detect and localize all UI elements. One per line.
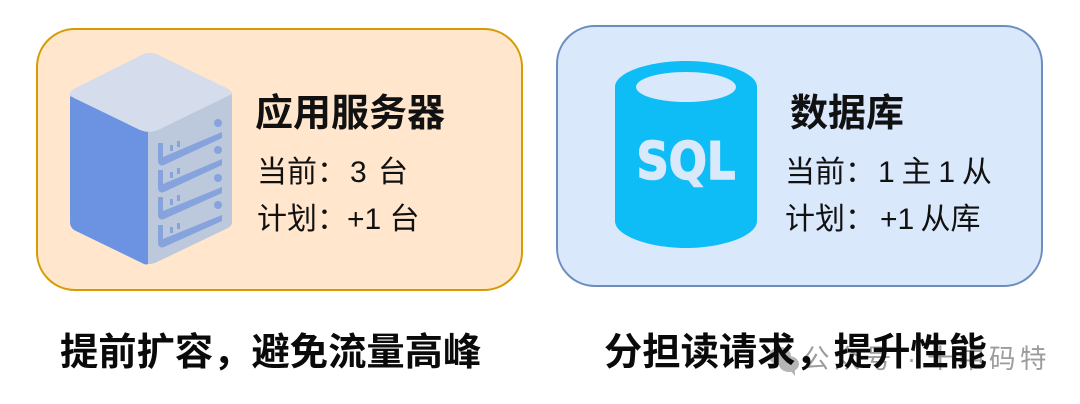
icon: SQL database cylinder: SQL <box>636 132 736 192</box>
caption: database: 分担读请求，提升性能 <box>604 331 987 374</box>
watermark <box>769 344 1051 376</box>
text: server current: 当前：3 台 <box>257 156 408 189</box>
text: database current: 当前：1 主 1 从 <box>785 156 992 189</box>
heading: application server: 应用服务器 <box>255 93 445 135</box>
text: watermark name: · <box>907 344 916 374</box>
panel: database <box>556 25 1043 287</box>
icon: server <box>70 53 232 264</box>
icon: SQL database cylinder <box>615 61 757 248</box>
text: server plan: 计划：+1 台 <box>257 203 420 236</box>
panel: application servers <box>36 28 523 291</box>
icon: chat bubbles <box>769 347 799 376</box>
text: database plan: 计划：+1 从库 <box>785 203 981 236</box>
heading: database: 数据库 <box>790 93 904 135</box>
caption: server: 提前扩容，避免流量高峰 <box>60 331 481 374</box>
text: watermark name: 公众号 十中码特 <box>803 344 1051 374</box>
